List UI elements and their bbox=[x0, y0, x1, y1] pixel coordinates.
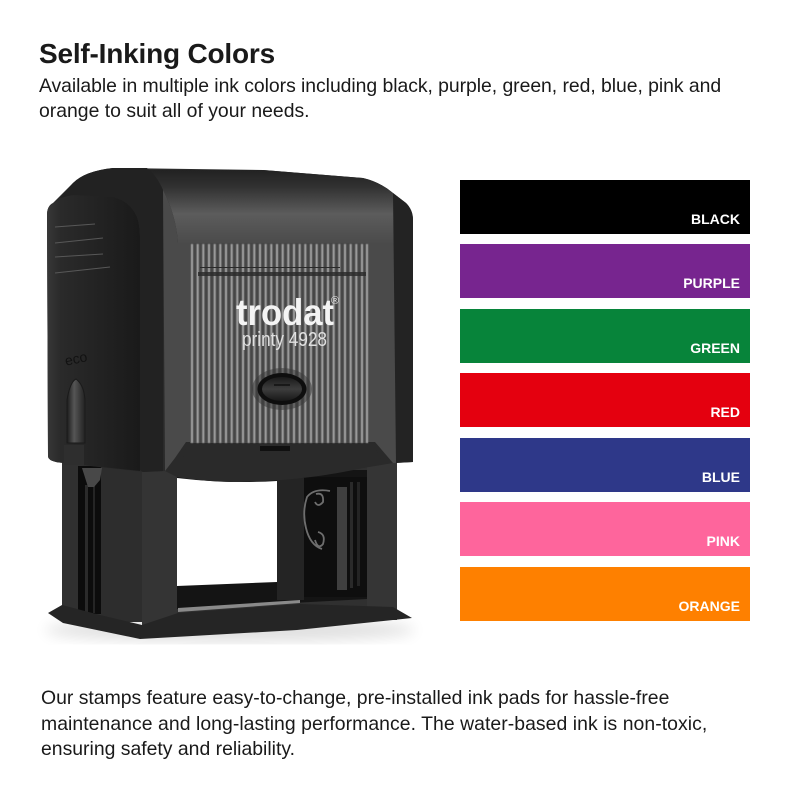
swatch: red: RED bbox=[710, 404, 740, 420]
title: Self-Inking Colors bbox=[39, 38, 275, 69]
footer text bbox=[41, 687, 707, 760]
ribbed grille bbox=[190, 243, 368, 443]
stamp base legs bbox=[62, 460, 397, 627]
swatch: green: GREEN bbox=[690, 340, 740, 356]
stamp body bbox=[47, 168, 413, 482]
side logo: eco bbox=[63, 348, 89, 369]
intro text bbox=[39, 75, 721, 122]
intro text: orange to suit all of your needs. bbox=[39, 100, 310, 122]
footer text: maintenance and long-lasting performance. The water-based ink is non-toxic, bbox=[41, 712, 707, 734]
swatch: red bbox=[460, 373, 750, 427]
release button bbox=[252, 368, 312, 410]
side lever bbox=[67, 379, 85, 443]
trodat logo: ® bbox=[331, 295, 339, 307]
stamp window bbox=[177, 470, 367, 612]
trodat logo: printy 4928 bbox=[242, 329, 327, 351]
side band bbox=[60, 168, 163, 472]
swatch: purple: PURPLE bbox=[683, 275, 740, 291]
swatch: orange bbox=[460, 566, 750, 620]
soft shadow under stamp bbox=[45, 618, 415, 642]
right strip bbox=[393, 193, 413, 463]
side ridges bbox=[55, 224, 110, 273]
swatch: black: BLACK bbox=[691, 211, 740, 227]
trodat logo: trodat bbox=[236, 292, 334, 333]
swatch: blue: BLUE bbox=[702, 468, 740, 484]
swatch: blue bbox=[460, 438, 750, 492]
top face bbox=[147, 170, 396, 243]
swatch: green bbox=[460, 308, 750, 362]
trodat logo bbox=[236, 292, 339, 351]
left panel bbox=[47, 195, 140, 471]
swatch: black bbox=[460, 180, 750, 234]
swatch: pink bbox=[460, 502, 750, 556]
front frame bbox=[163, 190, 396, 471]
colour swatches bbox=[460, 180, 750, 621]
swatch: pink: PINK bbox=[707, 533, 740, 549]
swatch: purple bbox=[460, 244, 750, 298]
swatch: orange: ORANGE bbox=[679, 598, 740, 614]
footer text: Our stamps feature easy-to-change, pre-installed ink pads for hassle-free bbox=[41, 687, 669, 709]
stamp foot bbox=[48, 604, 412, 639]
intro text: Available in multiple ink colors including black, purple, green, red, blue, pink and bbox=[39, 75, 721, 97]
under panel bbox=[177, 448, 383, 482]
footer text: ensuring safety and reliability. bbox=[41, 738, 295, 760]
